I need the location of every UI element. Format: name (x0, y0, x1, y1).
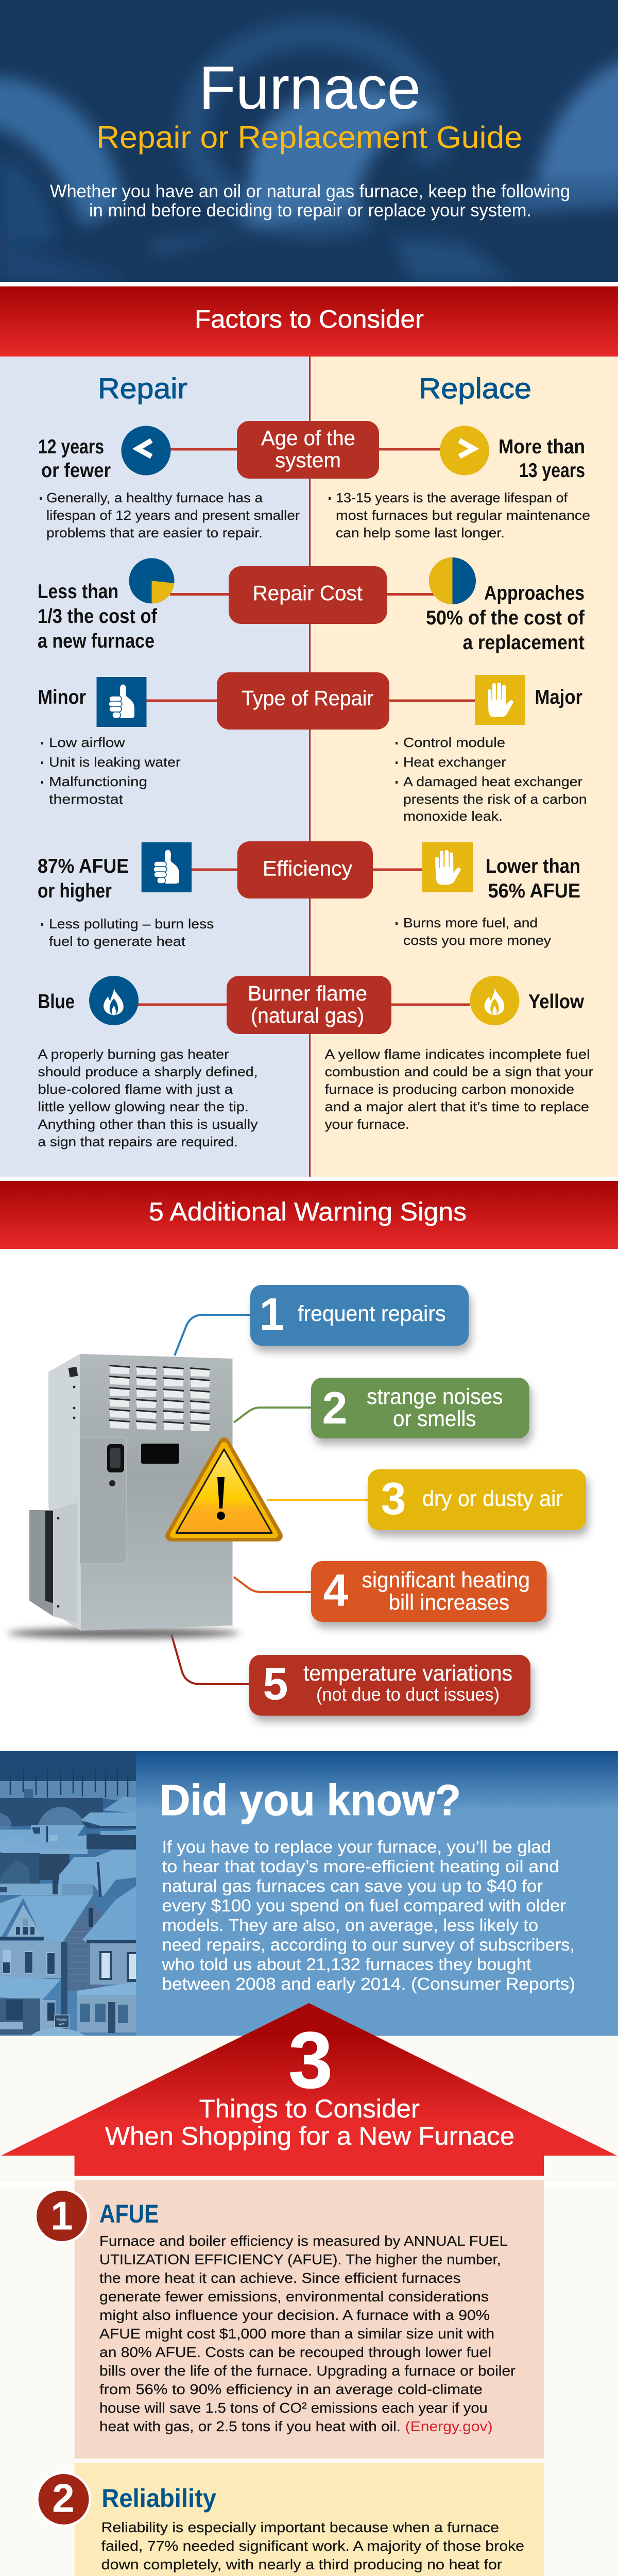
label: burner flame: (natural gas) (251, 1004, 364, 1027)
label: burner flame (227, 976, 391, 1034)
repair age notes: lifespan of 12 years and present smaller (46, 507, 300, 523)
replace age text: More than (499, 436, 585, 458)
row: type of repair (38, 672, 587, 824)
repair efficiency text (38, 855, 129, 902)
roof heading text (105, 2094, 514, 2150)
repair cost text: a new furnace (38, 630, 154, 652)
icon: yellow flame (470, 976, 519, 1025)
reliability body: Reliability is especially important because when a furnace (101, 2519, 499, 2535)
warning sign 5: (not due to duct issues) (316, 1684, 500, 1705)
replace age text: 13 years (519, 460, 585, 482)
yellow flame description: A yellow flame indicates incomplete fuel (325, 1046, 590, 1062)
reliability heading: Reliability (101, 2484, 216, 2513)
AFUE body: might also influence your decision. A furnace with a 90% (99, 2307, 490, 2323)
row: age of the system (38, 421, 590, 540)
replace age notes: most furnaces but regular maintenance (336, 507, 590, 523)
panel: reliability (36, 2463, 544, 2576)
yellow flame description: your furnace. (325, 1116, 409, 1132)
image: snowy houses (0, 1752, 136, 2036)
warning sign 3: 3 (381, 1473, 406, 1524)
reliability body: failed, 77% needed significant work. A majority of those broke (101, 2538, 524, 2554)
warning sign 1 (250, 1285, 469, 1346)
blue flame description: little yellow glowing near the tip. (38, 1099, 249, 1114)
repair age text: or fewer (41, 460, 111, 482)
replace age notes: 13-15 years is the average lifespan of (336, 490, 568, 505)
icon: thumbs up (142, 842, 192, 892)
handle and display (107, 1444, 179, 1486)
label: burner flame: Burner flame (248, 981, 367, 1005)
subtitle: Repair or Replacement Guide (96, 120, 522, 155)
roof heading text: When Shopping for a New Furnace (105, 2122, 514, 2150)
chart: one third pie (129, 558, 174, 603)
side openings (68, 1367, 78, 1419)
AFUE body: (Energy.gov) (405, 2418, 493, 2434)
illustration: furnace (8, 1354, 239, 1638)
icon: stop hand (422, 842, 473, 892)
warning sign 4: significant heating (362, 1568, 530, 1592)
minor repair list (41, 735, 181, 807)
label: type of repair: Type of Repair (242, 686, 374, 710)
repair efficiency notes (41, 916, 214, 949)
blue flame description: a sign that repairs are required. (38, 1134, 238, 1149)
replace column background (311, 357, 618, 1177)
major repair list: Heat exchanger (403, 754, 506, 770)
reliability body (101, 2519, 524, 2576)
AFUE body: bills over the life of the furnace. Upgrading a furnace or boiler (99, 2363, 516, 2379)
connector lines (171, 1315, 368, 1684)
AFUE body: Furnace and boiler efficiency is measured by ANNUAL FUEL (99, 2233, 508, 2249)
repair column background (0, 357, 309, 1177)
repair efficiency notes: fuel to generate heat (49, 934, 186, 949)
label: age of the system: Age of the (261, 426, 355, 450)
blue flame description (38, 1046, 258, 1149)
minor repair list: Unit is leaking water (49, 754, 181, 770)
warning sign 3 (368, 1469, 586, 1530)
icon: stop hand (475, 675, 525, 725)
major repair list (396, 735, 587, 824)
replace efficiency notes: costs you more money (403, 933, 551, 948)
warning sign 2: or smells (393, 1406, 476, 1431)
header panel (0, 0, 618, 282)
AFUE heading: AFUE (99, 2199, 159, 2228)
AFUE body: generate fewer emissions, environmental considerations (99, 2289, 489, 2304)
number badge 2 (36, 2471, 91, 2527)
major repair list: presents the risk of a carbon (403, 791, 587, 807)
row: repair cost (38, 557, 585, 654)
repair efficiency text: 87% AFUE (38, 855, 129, 877)
major repair list: monoxide leak. (403, 808, 503, 824)
label: repair cost (229, 566, 387, 624)
replace cost text: a replacement (462, 632, 585, 654)
AFUE body: from 56% to 90% efficiency in an average cold-climate (99, 2381, 483, 2397)
icon: less than (122, 426, 171, 475)
minor label: Minor (38, 686, 86, 708)
warning sign 4: 4 (323, 1565, 349, 1616)
louvers (109, 1365, 210, 1431)
repair age text: 12 years (38, 436, 104, 458)
warning sign 4: bill increases (389, 1590, 509, 1615)
minor repair list: Low airflow (49, 735, 125, 750)
replace efficiency text: Lower than (486, 855, 580, 877)
replace age notes: can help some last longer. (336, 525, 505, 540)
warning sign 5: 5 (263, 1658, 288, 1709)
yellow flame description: and a major alert that it’s time to replace (325, 1099, 589, 1114)
warning sign 5: temperature variations (303, 1661, 512, 1686)
AFUE body: heat with gas, or 2.5 tons if you heat with oil. (99, 2418, 401, 2434)
label: efficiency: Efficiency (263, 856, 352, 880)
major label: Major (535, 686, 582, 708)
major repair list: Control module (403, 735, 505, 750)
icon: warning triangle (171, 1443, 277, 1536)
sign: WRONG (56, 2019, 67, 2022)
sign: WAY (59, 2023, 65, 2026)
AFUE body: UTILIZATION EFFICIENCY (AFUE). The higher the number, (99, 2251, 501, 2267)
replace efficiency notes (396, 915, 551, 948)
chart: half pie (429, 557, 476, 604)
replace cost text: 50% of the cost of (426, 607, 585, 629)
blue flame description: A properly burning gas heater (38, 1046, 229, 1062)
blue flame description: blue-colored flame with just a (38, 1081, 233, 1097)
label: age of the system: system (275, 448, 341, 472)
major repair list: A damaged heat exchanger (403, 774, 582, 789)
AFUE body: AFUE might cost $1,000 more than a similar size unit with (99, 2326, 494, 2342)
panel: factors comparison (0, 357, 618, 1177)
did you know heading: Did you know? (160, 1776, 461, 1824)
warning sign 4 (311, 1561, 547, 1622)
AFUE body: an 80% AFUE. Costs can be recouped through lower fuel (99, 2344, 491, 2360)
furnace side panel (48, 1354, 81, 1631)
repair cost text: 1/3 the cost of (38, 605, 158, 628)
did you know body: need repairs, according to our survey of subscribers, (162, 1935, 575, 1954)
label: efficiency (237, 841, 373, 899)
roof heading text: Things to Consider (199, 2094, 420, 2123)
row: efficiency (38, 841, 580, 949)
blower housing (29, 1503, 77, 1623)
intro text (50, 181, 570, 221)
AFUE body (99, 2233, 516, 2434)
header background image (0, 0, 618, 282)
did you know body (161, 1837, 575, 1993)
column heading: repair: Repair (98, 372, 187, 404)
furnace front panel (80, 1354, 233, 1631)
icon: blue flame (89, 976, 139, 1025)
panel: AFUE (34, 2180, 544, 2459)
things to consider background (0, 2036, 618, 2576)
did you know body: who told us about 21,132 furnaces they bought (161, 1955, 531, 1974)
warning sign 1: frequent repairs (298, 1301, 446, 1326)
blue flame description: Anything other than this is usually (38, 1116, 258, 1132)
heading banner: warning signs (0, 1181, 618, 1249)
intro text: in mind before deciding to repair or replace your system. (89, 200, 531, 221)
minor repair list: Malfunctioning (49, 774, 147, 789)
warning sign 2: strange noises (367, 1384, 503, 1409)
yellow flame description (325, 1046, 593, 1132)
replace cost text: Approaches (484, 582, 585, 604)
repair age notes (40, 490, 300, 540)
repair age notes: problems that are easier to repair. (46, 525, 263, 540)
replace age notes (329, 490, 590, 540)
warning sign 2 (311, 1378, 529, 1438)
did you know body: to hear that today’s more-efficient heating oil and (162, 1857, 559, 1876)
panel: did you know (0, 1751, 618, 2036)
yellow label: Yellow (528, 991, 585, 1013)
repair age text (38, 436, 111, 482)
did you know body: between 2008 and early 2014. (Consumer Reports) (162, 1974, 575, 1993)
repair efficiency text: or higher (38, 880, 112, 902)
replace efficiency notes: Burns more fuel, and (403, 915, 538, 930)
blue label: Blue (38, 991, 75, 1013)
repair cost text (38, 581, 158, 652)
repair cost text: Less than (38, 581, 118, 603)
label: repair cost: Repair Cost (252, 581, 363, 605)
warning sign 1: 1 (260, 1289, 284, 1340)
replace efficiency text (486, 855, 580, 902)
intro text: Whether you have an oil or natural gas furnace, keep the following (50, 181, 570, 201)
porch (0, 1976, 61, 2000)
title: Furnace (199, 54, 421, 122)
warning sign 5 (249, 1655, 530, 1716)
did you know body: every $100 you spend on fuel compared with older (162, 1896, 566, 1915)
big number 3: 3 (288, 2015, 333, 2105)
yellow flame description: combustion and could be a sign that your (325, 1064, 593, 1079)
yellow flame description: furnace is producing carbon monoxide (325, 1081, 574, 1097)
reliability body: down completely, with nearly a third producing no heat for (101, 2556, 502, 2572)
column heading: replace: Replace (419, 372, 531, 404)
did you know body: If you have to replace your furnace, you’ll be glad (162, 1837, 551, 1856)
heading banner: factors to consider (0, 286, 618, 357)
replace age text (499, 436, 585, 482)
AFUE body: house will save 1.5 tons of CO² emissions each year if you (99, 2400, 488, 2416)
replace cost text (426, 582, 585, 654)
number badge 1 (34, 2188, 90, 2244)
icon: greater than (440, 426, 489, 475)
siding house (64, 1902, 104, 1991)
blue flame description: should produce a sharply defined, (38, 1064, 258, 1079)
sign (55, 2015, 69, 2027)
AFUE body: the more heat it can achieve. Since efficient furnaces (99, 2270, 461, 2286)
repair efficiency notes: Less polluting – burn less (49, 916, 214, 931)
did you know body: natural gas furnaces can save you up to $40 for (162, 1876, 543, 1895)
row: burner flame (38, 976, 593, 1149)
repair age notes: Generally, a healthy furnace has a (46, 490, 263, 505)
label: age of the system (237, 421, 379, 479)
main house (0, 1895, 93, 1942)
warning sign 3: dry or dusty air (422, 1486, 563, 1511)
house roof heading (1, 2003, 617, 2176)
icon: thumbs up (97, 677, 146, 727)
minor repair list: thermostat (49, 791, 124, 807)
number badge 2: 2 (52, 2475, 75, 2520)
warning sign 2: 2 (322, 1382, 347, 1433)
replace efficiency text: 56% AFUE (488, 880, 580, 902)
label: type of repair (217, 672, 389, 730)
did you know body: models. They are also, on average, less likely to (162, 1916, 538, 1935)
heading banner: factors to consider: Factors to Consider (195, 306, 424, 333)
number badge 1: 1 (50, 2193, 73, 2238)
heading banner: warning signs: 5 Additional Warning Signs (149, 1197, 467, 1226)
